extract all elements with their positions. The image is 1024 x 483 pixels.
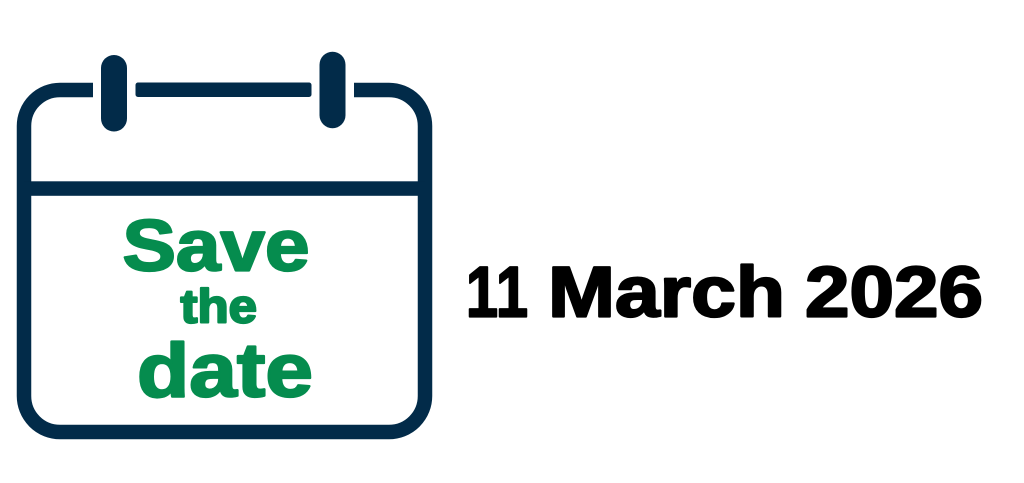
heading: Save the date (122, 206, 313, 414)
calendar left ring (101, 55, 127, 132)
text: date: date (137, 328, 313, 414)
text: 11 (466, 254, 528, 332)
text: 11: 1 (466, 254, 498, 332)
text: March: March (548, 254, 785, 332)
date text (466, 254, 983, 332)
text: 2026: 2026 (805, 254, 983, 332)
text: 11: 1 (496, 254, 528, 332)
calendar right ring (320, 52, 346, 128)
calendar top bar segment (136, 82, 312, 97)
calendar header divider (24, 181, 425, 196)
calendar body outline (24, 90, 425, 432)
text: the: the (180, 280, 257, 332)
icon: calendar (24, 52, 425, 432)
text: Save: Save (122, 206, 310, 286)
